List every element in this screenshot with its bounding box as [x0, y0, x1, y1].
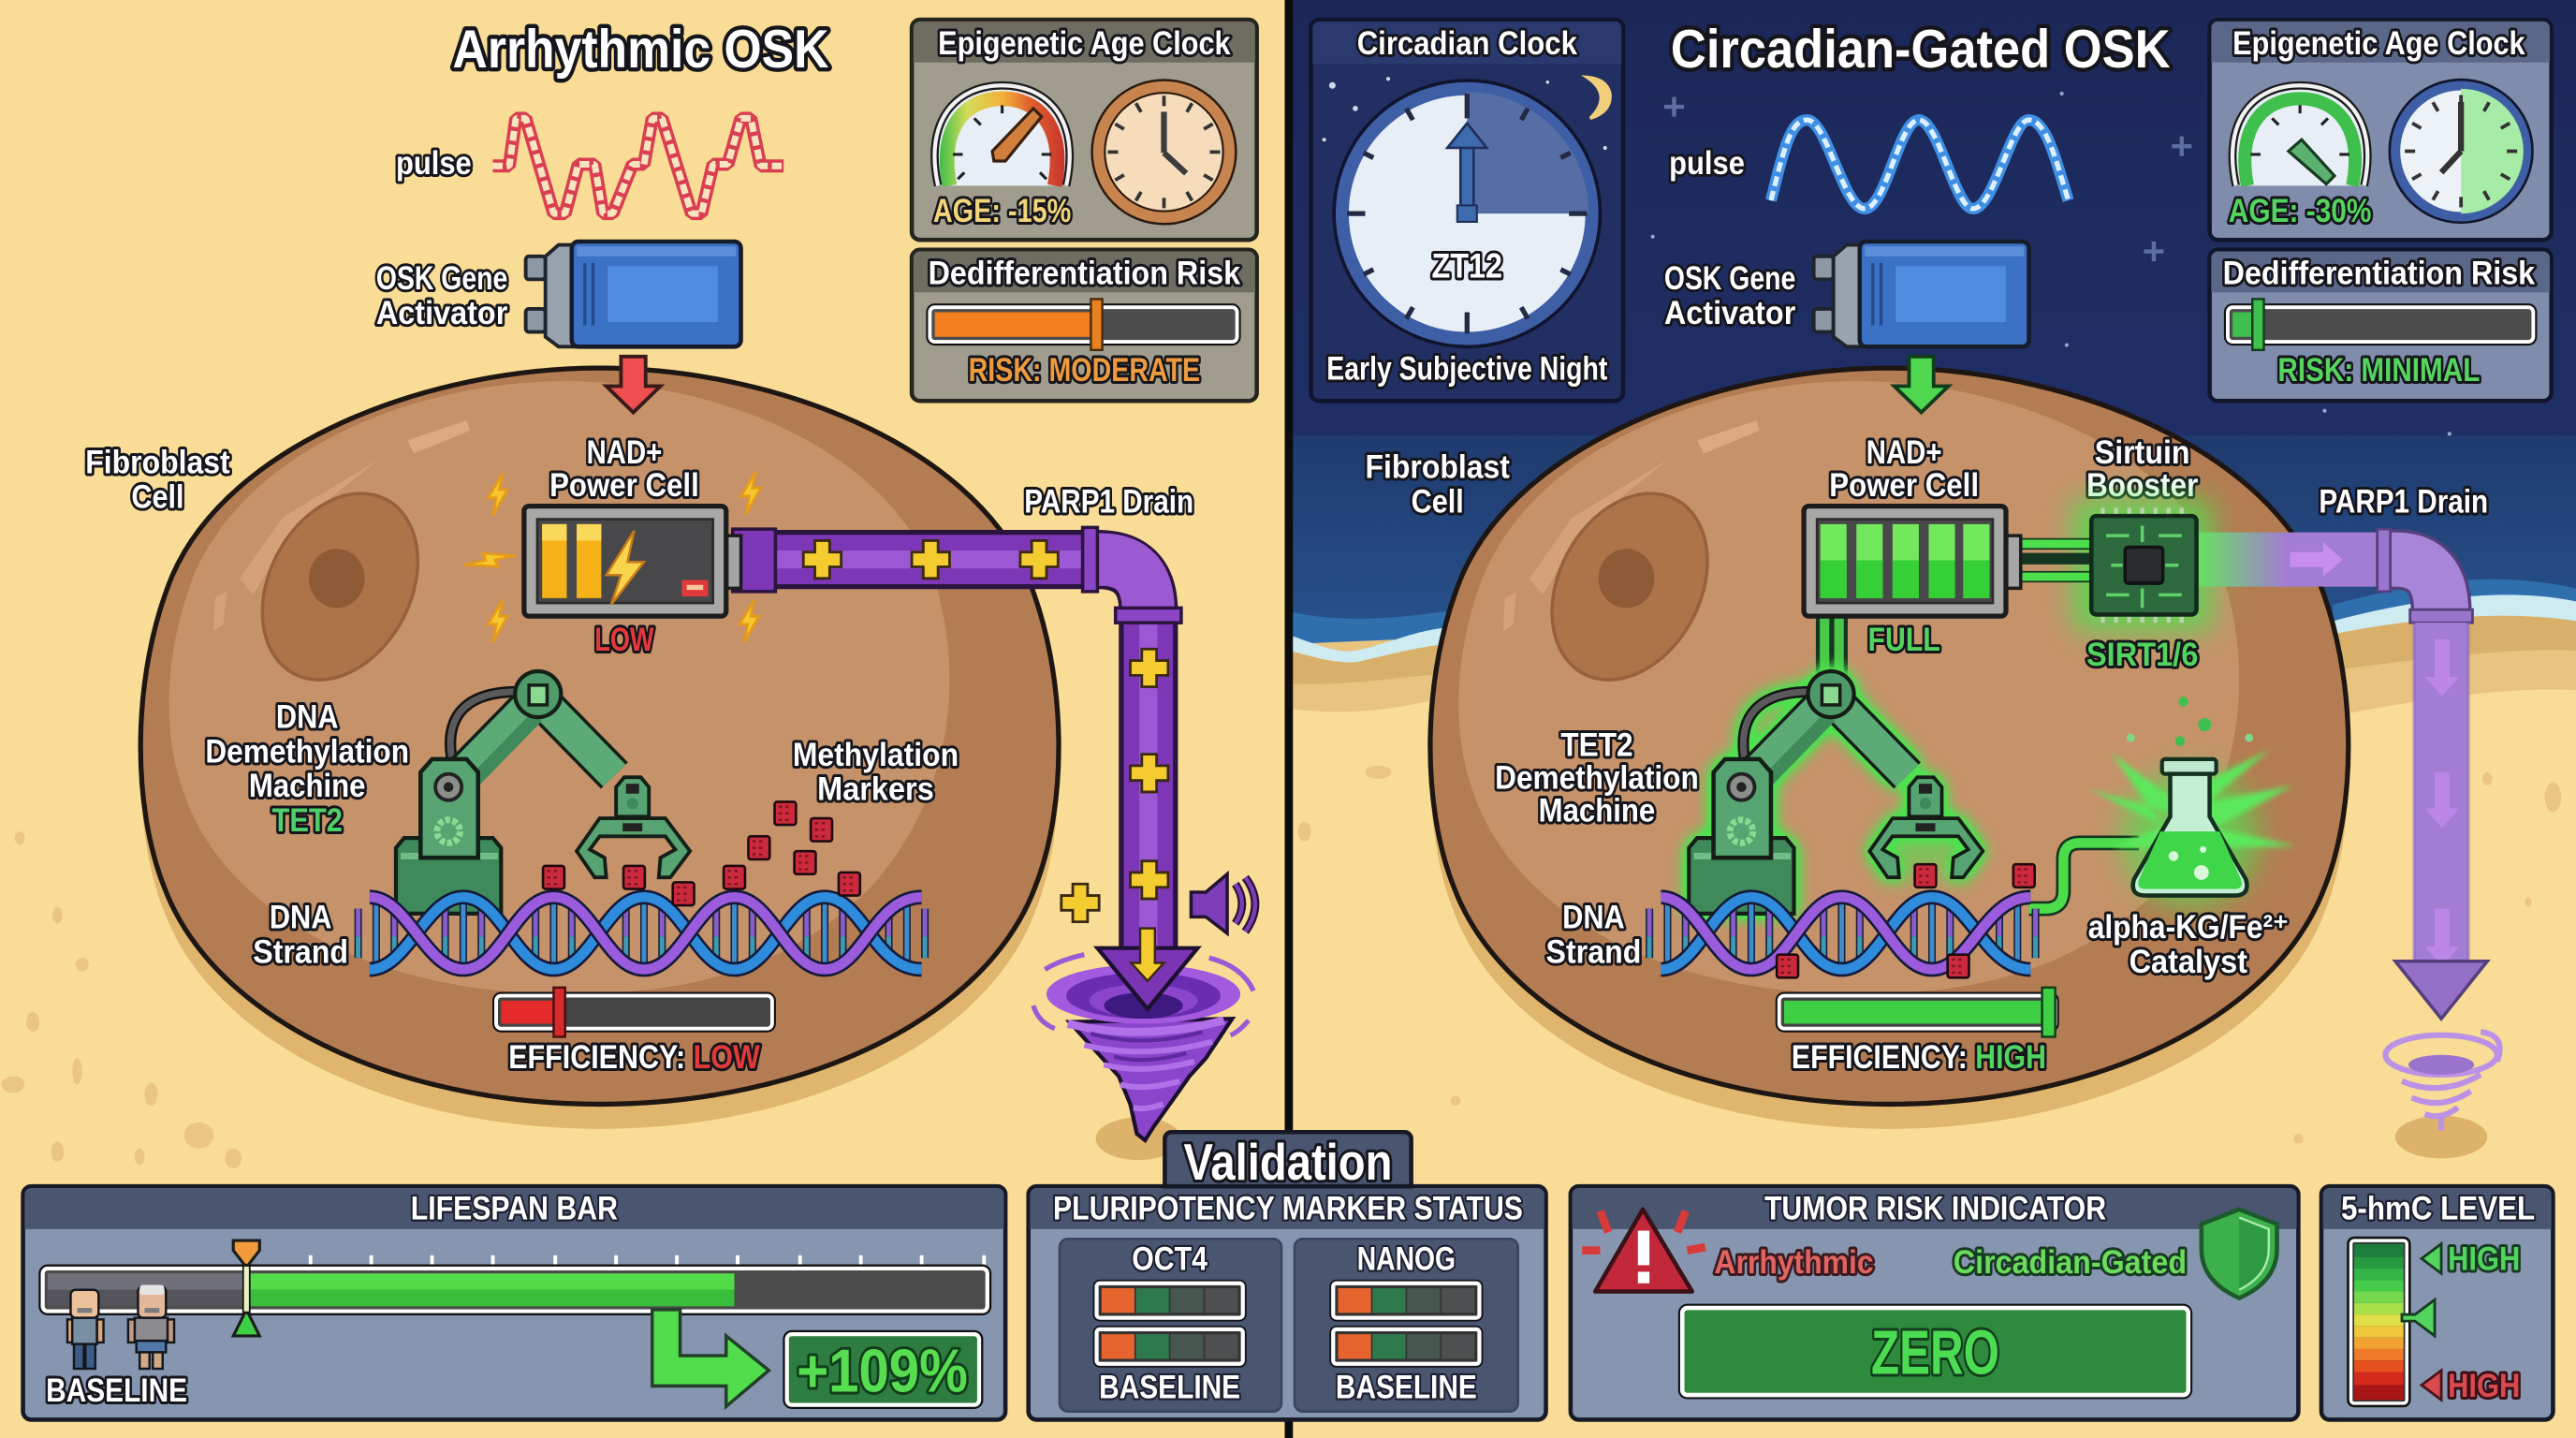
- label: DNA strand left: [253, 900, 348, 970]
- panel: tumor risk indicator: [1571, 1186, 2298, 1419]
- pulse label and smooth wave: [1669, 120, 2069, 209]
- label: NAD+ power cell right: Power Cell: [1829, 467, 1979, 504]
- OSK gene activator left: Activator: [376, 295, 508, 331]
- green bus lines: [2019, 544, 2091, 577]
- panel: 5-hmC level: [2321, 1186, 2553, 1419]
- stars: [1323, 77, 1607, 150]
- risk value: RISK: MINIMAL: [2277, 352, 2480, 389]
- NANOG card: BASELINE: [1336, 1370, 1477, 1406]
- OCT4 card: [1060, 1239, 1281, 1412]
- label: PARP1 drain right: PARP1 Drain: [2319, 484, 2488, 521]
- icon: low battery: [524, 506, 741, 616]
- gauge: [2232, 85, 2367, 185]
- gain arrow: [652, 1310, 768, 1406]
- efficiency bar high: [1779, 988, 2056, 1036]
- shadow under vortex: [1096, 1117, 1181, 1160]
- label: DNA strand left: DNA: [270, 900, 332, 936]
- heading: LIFESPAN BAR: [411, 1190, 618, 1226]
- NANOG card: [1295, 1239, 1518, 1412]
- label: DNA demethylation machine left: Machine: [249, 768, 366, 804]
- label: sirtuin booster: Sirtuin: [2095, 434, 2190, 471]
- yellow plus signs: [803, 540, 1168, 922]
- OCT4 card: OCT4: [1132, 1241, 1208, 1278]
- right fibroblast cell: [1430, 368, 2349, 1129]
- panel: dedifferentiation risk (arrhythmic): [912, 250, 1257, 401]
- label: fibroblast cell left: Cell: [131, 478, 184, 515]
- efficiency bar low: [496, 988, 772, 1036]
- shadow under small vortex: [2395, 1116, 2487, 1158]
- tube inner: [2029, 843, 2139, 909]
- label: DNA strand right: Strand: [1546, 933, 1641, 970]
- risk bar: [929, 299, 1237, 350]
- pulse label and jagged wave: [396, 118, 783, 213]
- icon: speaker: [1191, 874, 1255, 933]
- label: DNA strand right: DNA: [1562, 900, 1625, 936]
- faded PARP1 pipe right: [2198, 529, 2487, 1019]
- center divider: [1284, 0, 1293, 1438]
- heading: 5-hmC LEVEL: [2341, 1190, 2535, 1226]
- arrow: green into cell: [1895, 357, 1949, 413]
- scale ticks: [311, 1255, 984, 1267]
- vortex left: [1033, 955, 1253, 1140]
- green glow behind chip and flask: [1889, 500, 2259, 907]
- panel: dedifferentiation risk (circadian): [2210, 250, 2552, 401]
- efficiency label high: EFFICIENCY: HIGH: [1792, 1039, 2046, 1076]
- label: TET2 demethylation machine right: Machine: [1539, 793, 1655, 829]
- label: DNA demethylation machine left: DNA: [276, 699, 339, 736]
- label: catalyst: alpha-KG/Fe²⁺: [2088, 909, 2289, 946]
- pulse label and smooth wave: pulse: [1669, 145, 1745, 182]
- heading: Epigenetic Age Clock: [938, 25, 1231, 62]
- icon: catalyst flask: [2088, 697, 2297, 896]
- moon: [1587, 77, 1610, 118]
- OSK gene activator right: OSK Gene: [1664, 260, 1795, 297]
- label: low: LOW: [594, 622, 654, 658]
- label: catalyst: Catalyst: [2130, 944, 2247, 980]
- wall clock: [1092, 80, 1236, 224]
- age value: AGE: -15%: [933, 193, 1071, 229]
- label: NAD+ power cell left: NAD+: [587, 434, 662, 471]
- background: circadian night and beach side: [1288, 0, 2576, 1438]
- sparks around battery: [462, 472, 761, 642]
- lifespan track: [43, 1269, 988, 1312]
- value box: zero: ZERO: [1871, 1318, 1999, 1387]
- label: TET2 demethylation machine right: [1495, 726, 1699, 829]
- top marker: [2422, 1241, 2520, 1278]
- heading: PLURIPOTENCY MARKER STATUS: [1053, 1190, 1523, 1226]
- label: fibroblast cell left: Fibroblast: [85, 444, 230, 480]
- catalyst tube: [2029, 843, 2139, 909]
- panel: epigenetic age clock (circadian): [2210, 20, 2552, 240]
- background: arrhythmic sand side: [0, 0, 1288, 1438]
- bottom marker: HIGH: [2448, 1368, 2520, 1404]
- heading: Dedifferentiation Risk: [2223, 256, 2536, 292]
- sand speckles: [2, 766, 2561, 1168]
- panel: circadian clock: [1311, 20, 1623, 401]
- bottom marker: [2422, 1368, 2520, 1404]
- heading: Epigenetic Age Clock: [2232, 25, 2525, 62]
- label: arrhythmic: Arrhythmic: [1714, 1244, 1874, 1281]
- phase label: Early Subjective Night: [1326, 350, 1608, 387]
- risk bar: [2228, 299, 2533, 350]
- risk value: RISK: MODERATE: [969, 352, 1200, 389]
- pulse label and jagged wave: pulse: [396, 145, 472, 182]
- vertical power bus to arm: [1818, 613, 1846, 679]
- label: NAD+ power cell right: NAD+: [1866, 434, 1942, 471]
- label: DNA demethylation machine left: Demethylation: [205, 733, 409, 770]
- gauge: [934, 85, 1070, 185]
- heading: Dedifferentiation Risk: [929, 256, 1241, 292]
- label: fibroblast cell right: Fibroblast: [1365, 449, 1510, 486]
- label: full: FULL: [1868, 622, 1940, 658]
- icon: shield: [2202, 1210, 2277, 1299]
- icon: sirtuin chip: [2091, 507, 2197, 623]
- clock dial: [1334, 81, 1600, 346]
- label: SIRT1/6: SIRT1/6: [2086, 637, 2198, 673]
- baseline label: BASELINE: [46, 1372, 187, 1409]
- robot arm left: [396, 671, 690, 914]
- gain value: +109%: [797, 1337, 968, 1405]
- top marker: HIGH: [2448, 1241, 2520, 1278]
- icon: warning triangle: [1582, 1210, 1705, 1292]
- label: DNA strand left: Strand: [253, 933, 348, 970]
- DNA helix right: [1649, 897, 2036, 970]
- arrow: red into cell: [607, 357, 661, 413]
- title: Arrhythmic OSK: Arrhythmic OSK: [453, 20, 829, 80]
- label: NAD+ power cell left: [549, 434, 699, 504]
- label: fibroblast cell right: [1365, 449, 1510, 521]
- panel: epigenetic age clock (arrhythmic): [912, 20, 1257, 240]
- arrowhead into vortex: [1097, 929, 1197, 1009]
- label: sirtuin booster: [2086, 434, 2199, 504]
- efficiency label low: EFFICIENCY: LOW: [508, 1039, 760, 1076]
- label: DNA strand right: [1546, 900, 1641, 970]
- heading: Circadian Clock: [1357, 25, 1577, 62]
- age value: AGE: -30%: [2229, 193, 2371, 229]
- icon: full battery: [1804, 506, 2021, 616]
- OSK gene activator right: Activator: [1664, 295, 1796, 331]
- label: fibroblast cell right: Cell: [1412, 484, 1464, 521]
- person: baseline older: [128, 1284, 174, 1369]
- label: circadian-gated: Circadian-Gated: [1954, 1244, 2187, 1281]
- panel: pluripotency marker status: [1029, 1186, 1546, 1419]
- methylation markers (red squares): [543, 801, 860, 905]
- title: Circadian-Gated OSK: Circadian-Gated OSK: [1671, 20, 2171, 80]
- label: NAD+ power cell right: [1829, 434, 1979, 504]
- label: fibroblast cell left: [85, 444, 230, 515]
- robot arm right with halo: [1689, 671, 1983, 914]
- marker: [233, 1240, 259, 1336]
- remaining methylation markers: [1777, 864, 2035, 977]
- pipe: PARP1 drain left: [731, 527, 1181, 956]
- label: methylation markers: Markers: [817, 771, 934, 808]
- OSK gene activator left: OSK Gene: [376, 260, 507, 297]
- middle marker: [2402, 1299, 2435, 1336]
- label: catalyst: [2088, 909, 2289, 980]
- wall clock: [2390, 80, 2532, 223]
- value box: zero: [1682, 1308, 2188, 1395]
- OCT4 card: BASELINE: [1099, 1370, 1240, 1406]
- ZT12 label: ZT12: [1432, 247, 1502, 286]
- label: TET2 demethylation machine right: TET2: [1560, 726, 1633, 763]
- gradient meter: [2351, 1240, 2407, 1403]
- OSK gene activator left: [376, 242, 741, 346]
- NANOG card: NANOG: [1357, 1241, 1456, 1278]
- tab: validation: Validation: [1184, 1134, 1392, 1191]
- label: DNA demethylation machine left: [205, 699, 409, 839]
- green connectors battery to chip: [2019, 544, 2091, 577]
- label: PARP1 drain left: PARP1 Drain: [1024, 484, 1193, 521]
- heading: TUMOR RISK INDICATOR: [1764, 1190, 2106, 1226]
- label: DNA demethylation machine left: TET2: [271, 802, 343, 839]
- label: methylation markers: Methylation: [793, 737, 959, 773]
- label: NAD+ power cell left: Power Cell: [549, 467, 699, 504]
- left fibroblast cell: [140, 368, 1059, 1129]
- panel: lifespan bar: [23, 1186, 1005, 1419]
- OSK gene activator right: [1664, 242, 2029, 346]
- label: sirtuin booster: Booster: [2086, 467, 2199, 504]
- DNA helix left: [359, 897, 925, 970]
- label: methylation markers: [793, 737, 959, 808]
- person: baseline younger: [67, 1290, 104, 1369]
- small vortex right: [2385, 1032, 2500, 1131]
- label: TET2 demethylation machine right: Demethylation: [1495, 759, 1699, 796]
